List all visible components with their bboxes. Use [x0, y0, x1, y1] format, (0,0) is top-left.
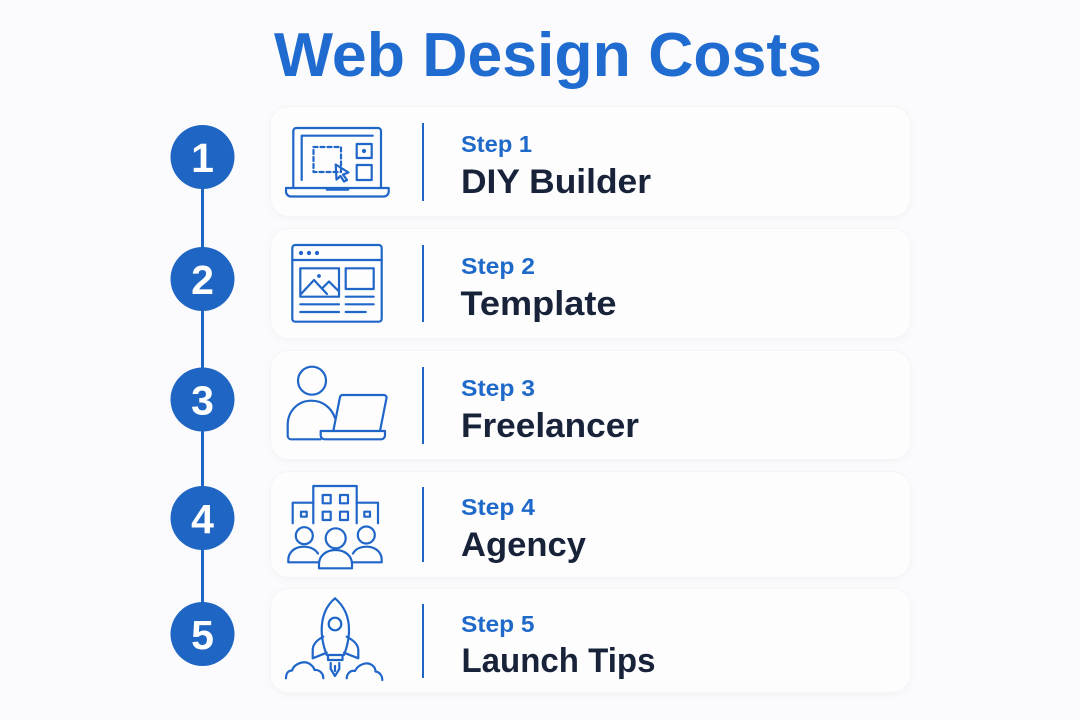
step 2 number badge [170, 247, 234, 311]
step 5 divider [422, 604, 424, 678]
step 1 number badge [170, 125, 234, 189]
step 1 row [170, 106, 910, 216]
step 4 number badge: 4 [191, 496, 214, 542]
step 3 label: Step 3 [461, 375, 535, 401]
step 5 row [170, 588, 910, 692]
timeline connector [201, 157, 204, 634]
icon: office building and team [288, 486, 382, 568]
step 2 label: Step 2 [461, 253, 535, 279]
step 1 card [270, 106, 910, 216]
step 1 name: DIY Builder [461, 163, 651, 201]
step 1 label: Step 1 [461, 131, 532, 157]
step 3 name: Freelancer [461, 407, 639, 445]
step 5 number badge: 5 [191, 612, 214, 658]
step 3 divider [422, 367, 424, 444]
icon: laptop with layout editor [286, 128, 389, 196]
step 5 label: Step 5 [461, 611, 534, 637]
step 5 number badge [170, 602, 234, 666]
step 2 row [170, 228, 910, 338]
step 4 name: Agency [461, 526, 586, 564]
step 3 number badge [170, 368, 234, 432]
step 3 number badge: 3 [191, 378, 214, 424]
step 1 divider [422, 123, 424, 201]
step 2 name: Template [460, 285, 616, 323]
step 5 name: Launch Tips [462, 642, 656, 680]
step 4 label: Step 4 [461, 494, 535, 520]
step 2 number badge: 2 [191, 257, 214, 303]
step 1 number badge: 1 [191, 135, 214, 181]
step 4 row [170, 472, 910, 578]
step 4 divider [422, 487, 424, 562]
step 4 number badge [170, 486, 234, 550]
step 5 card [270, 588, 910, 692]
icon: web page template [292, 245, 382, 322]
icon: rocket launching [286, 598, 382, 680]
icon: person at laptop [288, 367, 387, 439]
title: Web Design Costs [274, 21, 822, 90]
step 3 card [270, 350, 910, 460]
step 2 divider [422, 245, 424, 322]
step 3 row [170, 350, 910, 460]
step 2 card [270, 228, 910, 338]
step 4 card [270, 472, 910, 578]
